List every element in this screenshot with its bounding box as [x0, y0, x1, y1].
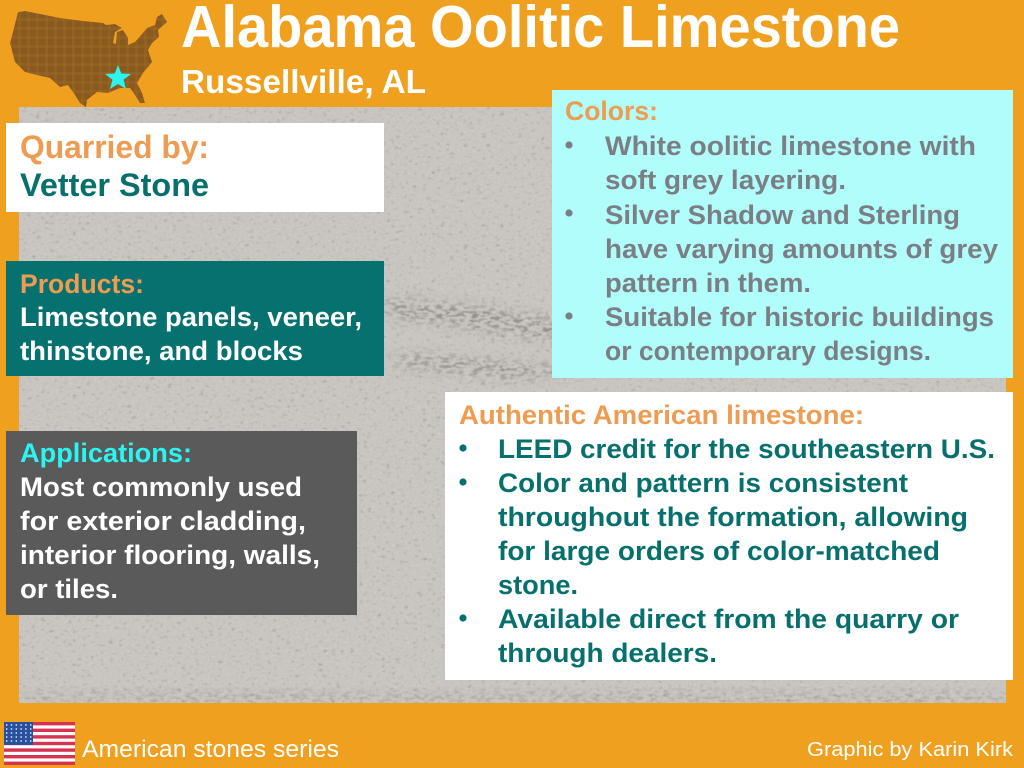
icon: US flag — [4, 722, 75, 765]
panel: applications: interior flooring, walls, — [20, 540, 320, 570]
panel: authentic american limestone: LEED credit for the southeastern U.S. — [498, 434, 995, 464]
panel: colors: Colors: — [565, 96, 658, 126]
panel: authentic american limestone: through dealers. — [498, 638, 717, 668]
panel: authentic american limestone: Available direct from the quarry or — [498, 604, 960, 634]
panel: authentic american limestone: throughout the formation, allowing — [498, 502, 968, 532]
subtitle: Russellville, AL — [181, 63, 426, 100]
panel: quarried by: Quarried by: — [20, 129, 209, 165]
panel: colors: Suitable for historic buildings — [605, 302, 994, 332]
icon: star — [105, 65, 131, 89]
panel: applications: for exterior cladding, — [20, 506, 306, 536]
panel: applications: Most commonly used — [20, 472, 302, 502]
panel: quarried by — [6, 123, 384, 212]
panel: products — [6, 261, 384, 376]
panel: products: Limestone panels, veneer, — [20, 302, 362, 332]
panel: colors: or contemporary designs. — [605, 336, 931, 366]
panel: colors: soft grey layering. — [605, 165, 846, 195]
panel: applications: or tiles. — [20, 574, 118, 604]
panel: colors: have varying amounts of grey — [605, 234, 998, 264]
panel: applications — [6, 431, 357, 615]
panel: authentic american limestone: stone. — [498, 570, 578, 600]
panel: quarried by: Vetter Stone — [20, 167, 209, 203]
panel: products: Products: — [20, 269, 144, 299]
panel: authentic american limestone: Color and pattern is consistent — [498, 468, 908, 498]
panel: authentic american limestone: Authentic American limestone: — [459, 400, 864, 430]
panel: products: thinstone, and blocks — [20, 336, 303, 366]
panel: authentic american limestone: for large orders of color-matched — [498, 536, 940, 566]
icon: US map with location star — [10, 11, 167, 107]
panel: applications: Applications: — [20, 438, 192, 468]
panel: authentic american limestone — [445, 392, 1013, 680]
panel: colors: Silver Shadow and Sterling — [605, 200, 960, 230]
footer: series label: American stones series — [82, 736, 339, 763]
panel: colors: White oolitic limestone with — [605, 131, 976, 161]
stone photo — [19, 107, 1006, 703]
panel: colors: pattern in them. — [605, 268, 811, 298]
panel: colors — [552, 90, 1013, 378]
footer: credit: Graphic by Karin Kirk — [807, 739, 1014, 761]
